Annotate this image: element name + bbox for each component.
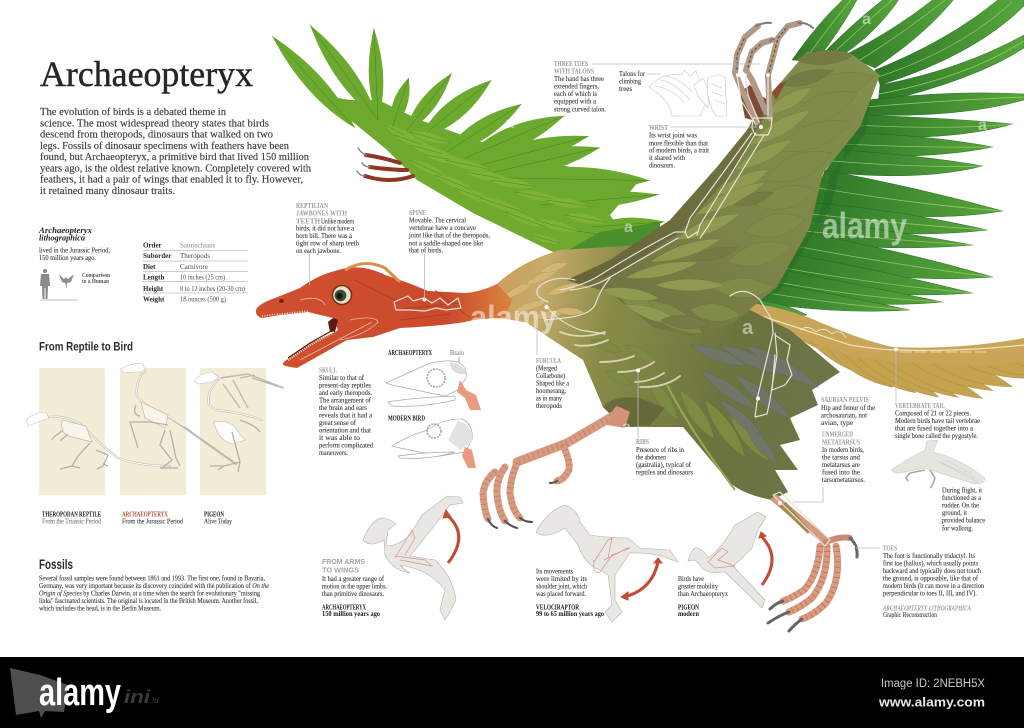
annotation: toes: The foot is functionally tridactyl. Its xyxy=(883,551,975,560)
annotation: reptilian jawbones: horn bill. There was a xyxy=(296,231,353,240)
annotation: three toes with talons xyxy=(554,61,606,114)
watermarks: a xyxy=(862,11,871,28)
text: velociraptor xyxy=(536,566,605,618)
data table xyxy=(143,242,248,304)
annotation: toes: perpendicular to toes II, III, and IV). xyxy=(883,588,977,598)
annotation: saurian pelvis: Hip and femur of the xyxy=(821,403,876,412)
annotation: furcula: FURCULA xyxy=(536,358,561,365)
annotation: vertebrate tail: VERTEBRATE TAIL xyxy=(895,403,945,410)
data table: 10 inches (25 cm) xyxy=(180,274,226,282)
intro text block: legs. Fossils of dinosaur specimens with feathers have been xyxy=(40,141,290,152)
head and neck xyxy=(256,263,512,368)
panel captions: From the Jurassic Period xyxy=(122,516,183,526)
watermarks xyxy=(470,11,987,436)
leader lines xyxy=(310,64,896,548)
near leg xyxy=(483,406,630,528)
intro text block: feathers, it had a pair of wings that enabled it to fly. However, xyxy=(40,175,303,186)
text: velociraptor: was placed forward. xyxy=(536,589,586,598)
annotation: three toes with talons: THREE TOES xyxy=(554,61,588,68)
annotation: skull: great sense of xyxy=(319,418,356,427)
annotation: talons for climbing: trees xyxy=(619,84,632,93)
annotation: wrist: WRIST xyxy=(649,125,668,132)
annotation: ribs: (gastralia), typical of xyxy=(636,460,691,469)
title: Archaeopteryx xyxy=(40,54,253,94)
annotation: reptilian jawbones: JAWBONES WITH xyxy=(296,210,348,218)
annotation: tail in flight: functioned as a xyxy=(942,493,982,502)
watermarks: a xyxy=(622,419,631,436)
annotation: skull: The arrangement of xyxy=(319,396,371,404)
annotation: three toes with talons: WITH TALONS xyxy=(554,68,594,76)
near wing coverts xyxy=(567,48,880,343)
annotation: tail in flight: ground, it xyxy=(942,508,968,517)
annotation: toes xyxy=(882,546,984,619)
annotation: furcula: (Merged xyxy=(536,364,557,372)
annotation: ribs: Presence of ribs in xyxy=(636,445,684,454)
annotation: ribs: RIBS xyxy=(636,439,649,446)
diagram: pigeon wing xyxy=(688,512,766,608)
rear leg xyxy=(768,497,857,631)
ribs overlay xyxy=(560,332,680,387)
annotation: wrist xyxy=(649,125,710,170)
annotation: skull: present-day reptiles xyxy=(319,380,371,390)
text: from arms to wings: It had a greater range of xyxy=(322,574,384,583)
annotation: unmerged metatarsus: the tarsus and xyxy=(822,452,860,462)
text: fossils: Several fossil samples were found between 1861 and 1993. The first one, found in Bavaria, xyxy=(39,574,265,582)
annotation: unmerged metatarsus: In modern birds, xyxy=(822,445,864,454)
pelvis overlay xyxy=(730,291,792,417)
far wing claws xyxy=(357,148,413,180)
annotation: toes: backward and typically does not touch xyxy=(883,566,981,575)
panel captions: From the Triassic Period xyxy=(42,516,101,526)
text: velociraptor: 99 to 65 million years ago xyxy=(536,611,605,618)
text: velociraptor: shoulder joint, which xyxy=(536,582,587,590)
skeleton overlays xyxy=(537,75,830,546)
text: fossils xyxy=(39,574,270,612)
logo: alamy xyxy=(10,668,159,718)
intro text block: science. The most widespread theory states that birds xyxy=(40,118,269,129)
annotation: reptilian jawbones: tight row of sharp teeth xyxy=(296,238,359,248)
body xyxy=(495,245,840,500)
panel captions xyxy=(42,512,232,526)
annotation: reptilian jawbones: Unlike modern xyxy=(321,216,354,226)
species block xyxy=(38,226,110,262)
panel: evolution skeletons xyxy=(26,364,284,495)
image id: Image ID: 2NEBH5X xyxy=(881,678,985,690)
annotation: unmerged metatarsus: METATARSUS xyxy=(822,440,860,446)
annotation: unmerged metatarsus xyxy=(822,432,865,484)
annotation: tail in flight: rudder. On the xyxy=(942,500,980,510)
annotation: talons for climbing: Talons for xyxy=(619,69,645,78)
annotation: tail in flight xyxy=(942,486,986,532)
annotation: toes: Graphic Reconstruction xyxy=(883,610,937,619)
text: fossils: Origin of Species by Charles Darwin, at a time when the search for evolutionary "missing xyxy=(39,590,260,598)
data table: Order xyxy=(143,242,162,250)
text: velociraptor: were limited by its xyxy=(536,574,587,583)
logo: alamy: ini xyxy=(124,687,151,707)
eye xyxy=(332,286,352,304)
data table: Weight xyxy=(143,296,165,304)
skull diagram: modern bird xyxy=(388,416,476,468)
arrow: arm motion xyxy=(443,510,459,563)
arrow: pigeon motion xyxy=(759,532,772,585)
heading: fossils: Fossils xyxy=(39,557,73,572)
annotation: reptilian jawbones: TEETH xyxy=(296,218,321,226)
text: fossils: links" fascinated scientists. The original is located in the British Museum. Another fossil, xyxy=(39,597,258,605)
text: from arms to wings: ARCHAEOPTERYX xyxy=(322,604,366,612)
annotation: spine: that of birds. xyxy=(409,246,443,254)
skeleton: archaeopteryx xyxy=(121,364,236,468)
data table: 18 ounces (500 g) xyxy=(180,296,227,304)
skeleton: theropodan reptile xyxy=(26,412,170,469)
annotation: wrist: Its wrist joint was xyxy=(649,130,697,140)
annotation: toes: first toe (hallux), which usually points xyxy=(883,558,978,568)
annotation: reptilian jawbones: birds, it did not have a xyxy=(296,224,355,232)
intro text block: years ago, is the oldest relative known. Completely covered with xyxy=(40,163,312,174)
annotation: skull: Similar to that of xyxy=(319,373,364,382)
annotation: toes: TOES xyxy=(883,546,897,552)
logo: alamy: .id xyxy=(150,696,159,705)
icon: size comparison to a human xyxy=(40,269,110,300)
intro text block xyxy=(40,107,312,197)
text: from arms to wings: FROM ARMS xyxy=(322,559,365,566)
icon: size comparison to a human: Comparison xyxy=(82,272,110,279)
annotation: tail in flight: During flight, it xyxy=(942,486,983,494)
data table: Suborder xyxy=(143,252,171,260)
watermarks: a xyxy=(742,317,754,339)
annotation: talons for climbing xyxy=(619,69,645,93)
annotation: three toes with talons: strong curved talon. xyxy=(554,104,606,114)
text: pigeon: modern xyxy=(678,611,699,618)
annotation: skull: maneuvers. xyxy=(319,448,348,457)
annotation: tail in flight: provided balance xyxy=(942,516,986,524)
annotation: skull: reveals that it had a xyxy=(319,410,373,420)
annotation: furcula: as in many xyxy=(536,394,562,402)
annotation: skull: orientation and that xyxy=(319,426,372,434)
annotation: vertebrate tail: Modern birds have tail vertebrae xyxy=(895,416,981,425)
watermarks: alamy xyxy=(470,299,557,335)
intro text block: descend from theropods, dinosaurs that walked on two xyxy=(40,130,273,141)
near wing primary feathers xyxy=(722,0,1024,318)
skull diagram: modern bird: MODERN BIRD xyxy=(388,416,425,422)
hand and claws xyxy=(735,23,813,122)
annotation: vertebrate tail: single bone called the pygostyle. xyxy=(895,431,978,440)
skull diagram: archaeopteryx: Brain xyxy=(450,348,464,357)
data table: 8 to 12 inches (20-30 cm) xyxy=(180,285,246,293)
annotation: three toes with talons: The hand has three xyxy=(554,74,605,83)
annotation: toes: modern birds (it can move in a direction xyxy=(883,581,984,590)
data table: Saurischians xyxy=(180,242,216,250)
text: fossils: which includes the head, is in the Berlin Museum. xyxy=(39,604,161,612)
annotation: unmerged metatarsus: tarsometatarsus. xyxy=(822,475,865,484)
annotation: toes: ARCHAEOPTERYX LITHOGRAPHICA xyxy=(882,606,971,612)
species block: 150 million years ago. xyxy=(39,253,96,262)
annotation: toes: the ground, is opposable, like that of xyxy=(883,574,978,582)
heading: from reptile to bird: From Reptile to Bird xyxy=(39,340,133,354)
text: from arms to wings: motion in the upper limbs. xyxy=(322,582,387,590)
watermarks: a xyxy=(624,219,633,236)
text: pigeon: PIGEON xyxy=(678,604,699,612)
annotation: unmerged metatarsus: metatarsus are xyxy=(822,460,861,469)
data table: Length xyxy=(143,274,164,282)
text: from arms to wings xyxy=(322,559,387,618)
data table: Diet xyxy=(143,263,156,271)
diagram: archaeopteryx arm xyxy=(363,496,463,620)
annotation: spine xyxy=(408,210,490,254)
text: from arms to wings: than primitive dinosaurs. xyxy=(322,589,384,598)
tail sketch xyxy=(891,440,985,488)
annotation: saurian pelvis: avian, type xyxy=(821,418,854,427)
annotation: furcula: theropods xyxy=(536,401,562,410)
annotation: wrist: of modern birds, a trait xyxy=(649,146,710,154)
talon sketch xyxy=(649,70,727,116)
tail xyxy=(723,302,1024,406)
data table: Height xyxy=(143,285,164,293)
footer bar xyxy=(0,657,1024,728)
neck vertebrae overlay xyxy=(394,296,461,311)
panel captions: Alive Today xyxy=(204,516,232,526)
annotation: ribs xyxy=(636,439,693,476)
annotation: skull xyxy=(319,368,373,457)
text: from arms to wings: 150 million years ago xyxy=(322,611,381,618)
annotation: spine: Movable. The cervical xyxy=(409,216,466,224)
annotation: furcula: boomerang, xyxy=(536,386,566,395)
far wing: upper left xyxy=(265,20,665,252)
annotation: furcula: Shaped like a xyxy=(536,378,570,388)
intro text block: found, but Archaeopteryx, a primitive bird that lived 150 million xyxy=(40,152,310,163)
data table: Carnivore xyxy=(180,263,208,271)
annotation: wrist: it shared with xyxy=(649,153,685,162)
annotation: skull: SKULL xyxy=(319,368,337,374)
annotation: tail in flight: for walking. xyxy=(942,524,973,532)
annotation: skull: and early theropods. xyxy=(319,388,372,397)
annotation: vertebrate tail: Composed of 21 or 22 pieces. xyxy=(895,408,971,418)
annotation: spine: joint like that of the theropods, xyxy=(408,230,490,240)
annotation: wrist: more flexible than that xyxy=(649,138,709,148)
annotation: talons for climbing: climbing xyxy=(619,76,641,86)
annotation: furcula: Collarbone) xyxy=(536,371,565,380)
logo: alamy: alamy xyxy=(39,672,121,714)
panel captions: PIGEON xyxy=(204,512,224,518)
annotation: saurian pelvis xyxy=(821,397,876,427)
annotation: spine: vertebrae have a concave xyxy=(409,223,477,232)
skull diagram: archaeopteryx xyxy=(386,348,481,410)
species block: Archaeopteryx xyxy=(38,226,92,235)
annotation: unmerged metatarsus: fused into the xyxy=(822,468,861,476)
annotation: spine: SPINE xyxy=(409,210,426,217)
panel captions: ARCHAEOPTERYX xyxy=(122,512,168,518)
primary feather shafts xyxy=(755,0,1024,310)
annotation: saurian pelvis: SAURIAN PELVIS xyxy=(821,397,869,404)
annotation: vertebrate tail: that are fused together into a xyxy=(895,424,974,432)
skull diagram: archaeopteryx: ARCHAEOPTERYX xyxy=(388,350,432,357)
annotation: wrist: dinosaurs. xyxy=(649,160,675,170)
annotation: furcula xyxy=(536,358,570,410)
annotation: ribs: reptiles and dinosaurs xyxy=(636,468,693,476)
data table: Theropods xyxy=(180,252,210,260)
annotation: skull: perform complicated xyxy=(319,440,373,450)
annotation: ribs: the abdomen xyxy=(636,452,666,462)
text: velociraptor: VELOCIRAPTOR xyxy=(536,604,579,612)
text: fossils: Germany, was very important because its discovery coincided with the publication of On the xyxy=(39,582,270,590)
annotation: reptilian jawbones xyxy=(296,203,359,255)
annotation: three toes with talons: extended fingers, xyxy=(554,82,599,90)
illustration: archaeopteryx xyxy=(256,0,1024,631)
watermarks: a xyxy=(505,115,514,132)
skeleton: pigeon xyxy=(194,372,284,472)
diagram: velociraptor arm xyxy=(536,505,678,622)
text: pigeon: Birds have xyxy=(678,574,705,583)
annotation: reptilian jawbones: on each jawbone. xyxy=(296,246,341,255)
text: pigeon xyxy=(678,574,728,618)
annotation: three toes with talons: equipped with a xyxy=(554,96,597,106)
annotation: skull: it was able to xyxy=(319,433,360,442)
text: from arms to wings: TO WINGS xyxy=(322,568,359,574)
text: pigeon: greater mobility xyxy=(678,582,718,590)
callout dots xyxy=(544,73,898,505)
watermarks: a xyxy=(978,117,987,134)
text: pigeon: than Archaeopteryx xyxy=(678,589,728,598)
annotation: unmerged metatarsus: UNMERGED xyxy=(822,432,853,438)
website: www.alamy.com xyxy=(878,694,985,710)
panel captions: THEROPODAN REPTILE xyxy=(42,512,101,518)
annotation: spine: not a saddle-shaped one like xyxy=(409,238,484,248)
text: velociraptor: Its movements xyxy=(536,566,573,576)
annotation: vertebrate tail xyxy=(895,403,981,440)
annotation: reptilian jawbones: REPTILIAN xyxy=(296,203,328,210)
watermarks: alamy xyxy=(822,205,907,246)
intro text block: it retained many dinosaur traits. xyxy=(40,186,175,197)
annotation: three toes with talons: each of which is xyxy=(554,89,597,98)
species block: lithographica xyxy=(39,234,85,243)
annotation: skull: the brain and ears xyxy=(319,403,367,412)
species block: lived in the Jurassic Period, xyxy=(39,246,110,254)
arrow: velociraptor motion xyxy=(621,558,662,600)
intro text block: The evolution of birds is a debated theme in xyxy=(40,107,227,118)
metatarsus overlay xyxy=(773,492,830,546)
icon: size comparison to a human: to a Human xyxy=(82,278,109,285)
annotation: saurian pelvis: archosaurian, not xyxy=(821,410,868,420)
